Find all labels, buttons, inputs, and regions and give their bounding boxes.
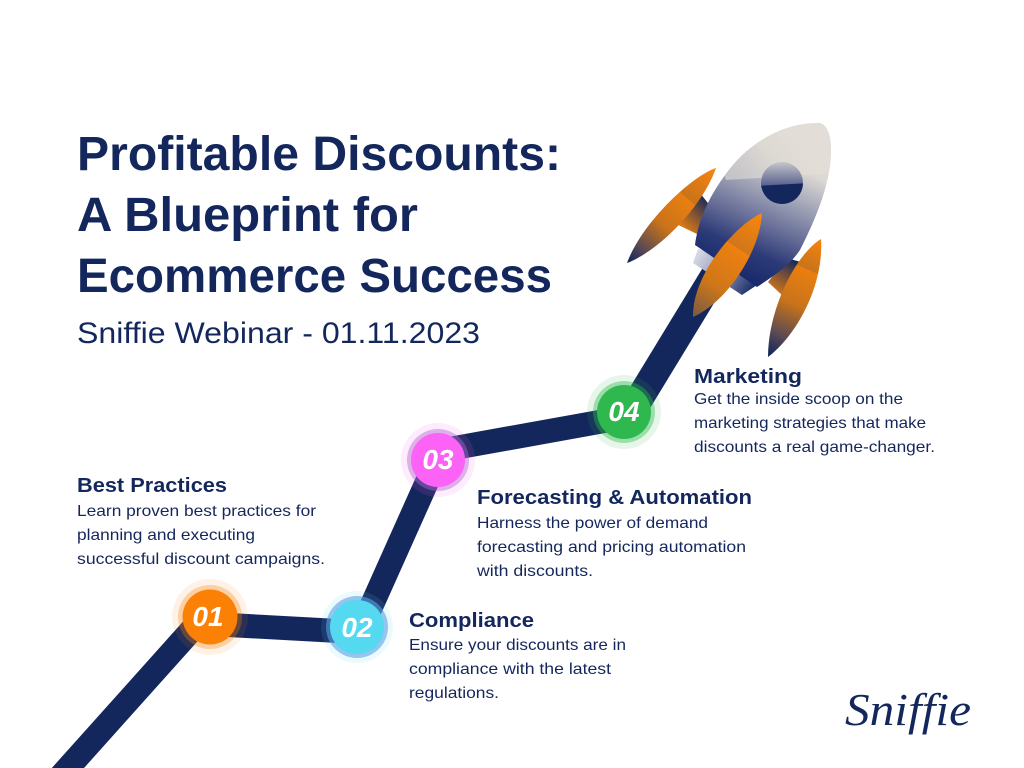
step 04 marker: [587, 375, 661, 449]
title: Profitable Discounts:: [77, 128, 561, 181]
growth path line: [50, 250, 730, 768]
text block: marketing: Get the inside scoop on the: [694, 391, 903, 408]
rocket left strut: [672, 193, 711, 234]
title: [77, 128, 561, 303]
text block: marketing: discounts a real game-changer.: [694, 439, 935, 456]
step 02 marker: [321, 591, 393, 663]
rocket nose cap: [724, 123, 831, 180]
rocket left fin: [627, 168, 716, 263]
rocket body: [695, 123, 831, 287]
text block: best practices: Learn proven best practices for: [77, 503, 317, 520]
text block: forecasting and automation: [476, 486, 752, 580]
title: Ecommerce Success: [77, 250, 552, 303]
text block: compliance: compliance with the latest: [409, 661, 612, 678]
text block: best practices: Best Practices: [77, 474, 227, 497]
infographic canvas: [52, 123, 970, 768]
logo: Sniffie: Sniffie: [845, 684, 971, 735]
text block: compliance: Compliance: [409, 609, 534, 632]
step 04 marker: 04: [608, 396, 640, 427]
rocket right fin: [768, 239, 821, 357]
step 03 marker: [401, 423, 475, 497]
step 03 marker: 03: [422, 444, 454, 475]
text block: best practices: planning and executing: [77, 527, 255, 544]
text block: marketing: marketing strategies that make: [694, 415, 926, 432]
rocket nozzle: [693, 249, 757, 295]
step 01 marker: [172, 579, 248, 655]
subtitle: Sniffie Webinar - 01.11.2023: [77, 317, 480, 350]
rocket window: [761, 162, 803, 204]
text block: best practices: successful discount campaigns.: [77, 551, 325, 568]
text block: marketing: Marketing: [694, 365, 802, 388]
step 02 marker: 02: [341, 612, 373, 643]
text block: compliance: [409, 609, 626, 702]
rocket: [627, 123, 831, 357]
text block: marketing: [694, 365, 935, 456]
step 01 marker: 01: [192, 601, 224, 632]
rocket right strut: [768, 258, 804, 298]
text block: forecasting and automation: Forecasting & Automation: [477, 486, 752, 509]
text block: forecasting and automation: Harness the power of demand: [477, 515, 708, 532]
text block: forecasting and automation: with discounts.: [476, 563, 593, 580]
title: A Blueprint for: [77, 189, 418, 242]
text block: compliance: regulations.: [409, 685, 499, 702]
rocket middle fin: [693, 213, 762, 317]
text block: compliance: Ensure your discounts are in: [409, 637, 626, 654]
text block: forecasting and automation: forecasting and pricing automation: [477, 539, 746, 556]
text block: best practices: [77, 474, 325, 568]
